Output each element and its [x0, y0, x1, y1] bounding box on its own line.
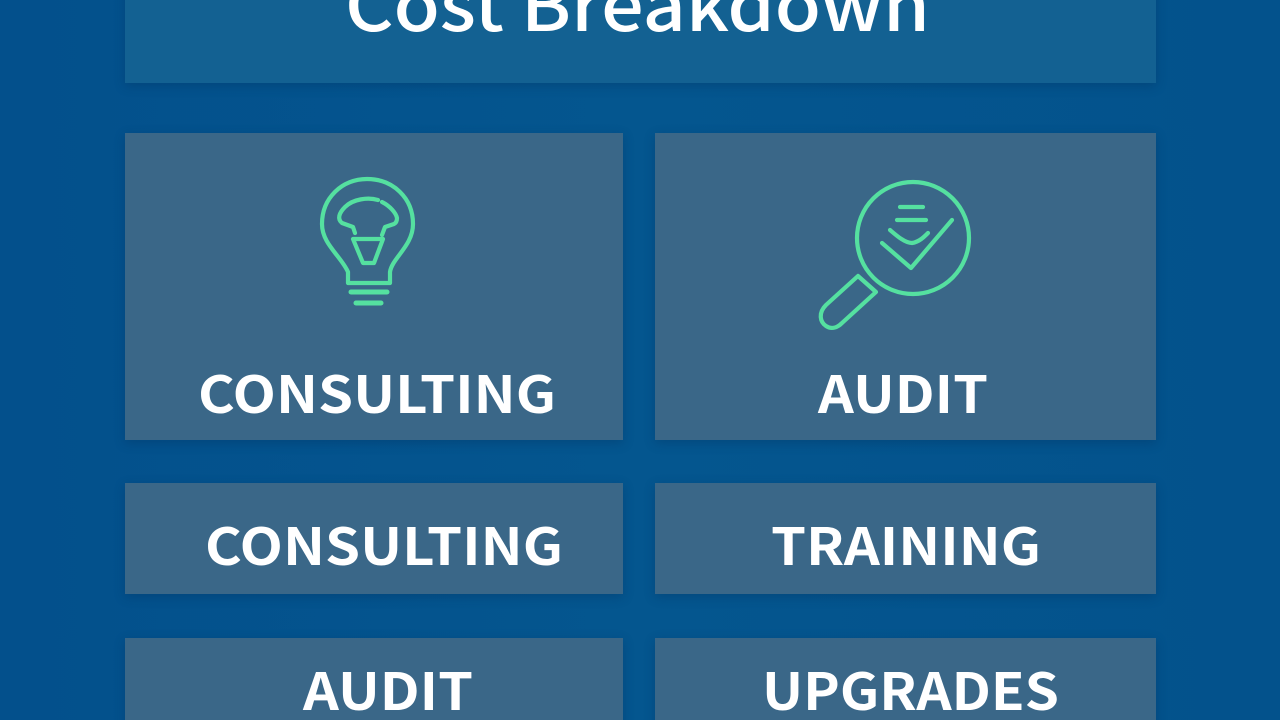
- label: CONSULTING: [198, 354, 556, 428]
- panel: training row: [655, 483, 1156, 594]
- icon: light bulb: [322, 179, 413, 303]
- panel: consulting row: [125, 483, 623, 594]
- icon: magnifying glass with check: [821, 182, 969, 328]
- panel: audit row: [125, 638, 623, 720]
- panel: upgrades row: [655, 638, 1156, 720]
- panel: consulting card: [125, 133, 623, 440]
- panel: audit card: [655, 133, 1156, 440]
- panel: title banner: [125, 0, 1156, 83]
- label: TRAINING: [771, 506, 1041, 580]
- label: AUDIT: [817, 354, 988, 428]
- label: CONSULTING: [205, 506, 563, 580]
